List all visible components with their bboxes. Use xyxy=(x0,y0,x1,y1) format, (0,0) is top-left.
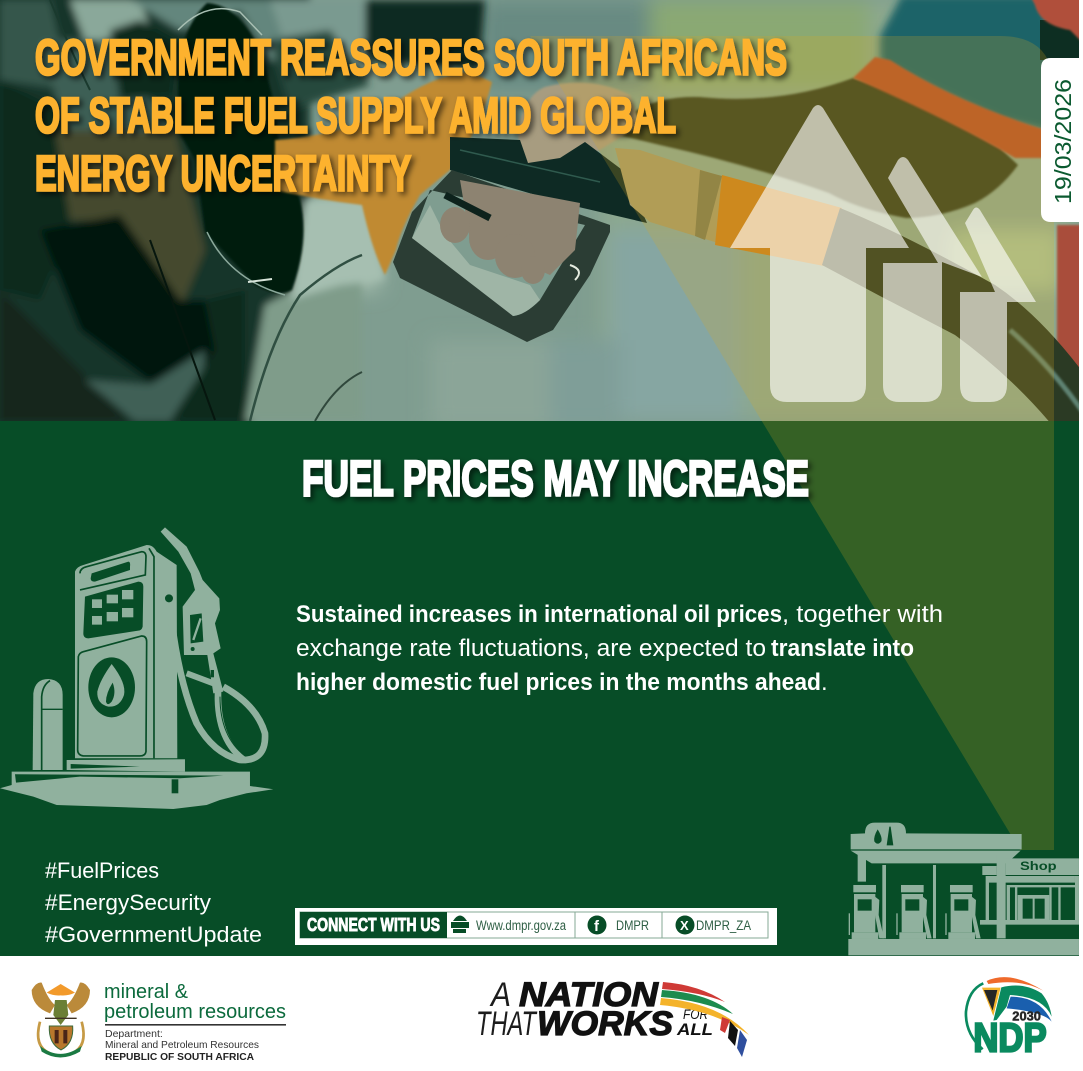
logo: department of mineral and petroleum resources: REPUBLIC OF SOUTH AFRICA xyxy=(105,1052,254,1063)
forecourt xyxy=(848,939,1079,955)
icon: web globe xyxy=(451,916,469,933)
dark hose xyxy=(822,208,1083,440)
heading: FUEL PRICES MAY INCREASE xyxy=(302,450,809,506)
logo: department of mineral and petroleum resources: Department: xyxy=(105,1028,163,1040)
body text xyxy=(296,601,943,696)
fingers on trigger xyxy=(440,180,580,284)
trigger guard frame xyxy=(393,170,610,342)
logo: a nation that works for all: A xyxy=(489,976,511,1014)
body text: higher domestic fuel prices in the months ahead xyxy=(296,669,821,696)
logo: department of mineral and petroleum resources: Mineral and Petroleum Resources xyxy=(105,1039,259,1051)
hashtags xyxy=(45,858,262,947)
date tab: 19/03/2026 xyxy=(1050,79,1076,204)
body text: Sustained increases in international oil prices xyxy=(296,601,782,628)
hashtags: #FuelPrices xyxy=(45,858,159,883)
orange collar xyxy=(715,175,842,266)
logo: a nation that works for all: FOR xyxy=(683,1006,708,1022)
body text: translate into xyxy=(771,635,914,662)
logo: a nation that works for all: ALL xyxy=(676,1020,713,1039)
car body xyxy=(0,0,485,430)
panel: translucent yellow overlay shape xyxy=(530,36,1054,850)
base xyxy=(67,759,185,772)
shop xyxy=(982,858,1079,875)
fist on nozzle xyxy=(518,82,640,167)
icon: X xyxy=(676,916,694,934)
body text: , together with xyxy=(782,601,943,628)
flag swoosh xyxy=(660,982,749,1057)
middle chevron xyxy=(883,157,982,402)
connect with us bar: DMPR xyxy=(616,918,649,933)
logo: a nation that works for all: WORKS xyxy=(537,1005,673,1043)
fuel nozzle guard in orange xyxy=(275,72,492,275)
logo: department of mineral and petroleum resources xyxy=(32,980,286,1063)
date tab xyxy=(1041,58,1079,222)
logo: department of mineral and petroleum resources: petroleum resources xyxy=(104,1000,286,1023)
pump body xyxy=(75,545,177,758)
icon: white rising arrows xyxy=(730,105,1036,402)
body text: exchange rate fluctuations, are expected to xyxy=(296,635,766,662)
bollard xyxy=(33,679,63,770)
fuel drop emblem xyxy=(88,657,135,717)
display xyxy=(91,562,130,582)
title xyxy=(35,30,787,202)
icon: coat of arms xyxy=(32,983,90,1057)
fuel door opening xyxy=(178,3,304,293)
icon: X: X xyxy=(680,918,689,933)
body text: . xyxy=(821,669,828,696)
icon: filling station: Shop xyxy=(1020,859,1057,873)
red background right xyxy=(1056,224,1079,367)
pump 1 xyxy=(849,885,884,939)
icon: facebook xyxy=(588,916,606,935)
large arrow xyxy=(730,105,909,402)
logo: a nation that works for all: THAT xyxy=(476,1005,538,1043)
logo: department of mineral and petroleum resources: mineral & xyxy=(104,980,188,1003)
connect with us bar: Www.dmpr.gov.za xyxy=(476,918,566,933)
title: OF STABLE FUEL SUPPLY AMID GLOBAL xyxy=(35,88,676,144)
title: ENERGY UNCERTAINTY xyxy=(35,146,411,202)
connect with us bar: CONNECT WITH US xyxy=(307,914,440,935)
platform xyxy=(0,772,273,809)
icon: filling station xyxy=(848,823,1079,955)
lower panel xyxy=(78,636,147,756)
keypad panel xyxy=(83,582,143,638)
nozzle handle xyxy=(450,137,647,223)
brass hose fitting xyxy=(615,148,722,242)
panel: photo of hand refuelling a car xyxy=(0,0,1083,440)
icon: fuel pump xyxy=(0,527,273,809)
pump 3 xyxy=(946,885,981,939)
connect with us bar xyxy=(295,908,777,945)
pump 2 xyxy=(897,885,932,939)
panel: green lower background xyxy=(0,421,1079,956)
logo: a nation that works for all xyxy=(476,976,749,1057)
canopy xyxy=(851,823,1022,849)
pale opening of trigger guard xyxy=(412,205,540,316)
icon: facebook: f xyxy=(594,918,600,935)
panel: white footer xyxy=(0,956,1083,1071)
logo: NDP 2030 xyxy=(966,977,1052,1061)
logo: NDP 2030: NDP xyxy=(973,1015,1047,1061)
hose xyxy=(169,600,265,760)
logo: NDP 2030: 2030 xyxy=(1012,1008,1041,1023)
arm sleeve xyxy=(610,78,1018,218)
nozzle xyxy=(161,527,223,693)
hashtags: #EnergySecurity xyxy=(45,890,212,915)
hashtags: #GovernmentUpdate xyxy=(45,922,262,947)
oil icon on canopy xyxy=(874,829,882,844)
logo: a nation that works for all: NATION xyxy=(519,976,660,1014)
shirt xyxy=(880,0,1062,135)
right chevron xyxy=(960,208,1036,402)
connect with us bar: DMPR_ZA xyxy=(696,918,751,933)
